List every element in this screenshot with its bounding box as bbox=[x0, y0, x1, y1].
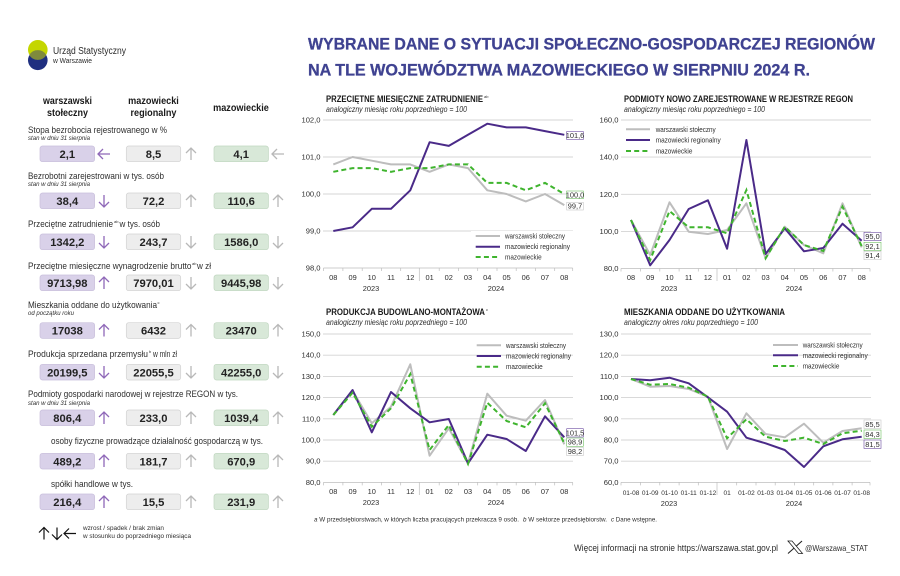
chart: przeciętne miesięczne zatrudnienie: 05 bbox=[502, 273, 511, 282]
chart: mieszkania oddane do użytkowania: 120,0 bbox=[599, 351, 618, 360]
indicator: produkcja sprzedana: 42255,0 bbox=[221, 367, 261, 379]
chart: mieszkania oddane do użytkowania: mazowiecki regionalny bbox=[803, 351, 868, 360]
chart: produkcja budowlano-montażowa: mazowieckie bbox=[506, 362, 543, 371]
indicator: bezrobotni zarejestrowani: stan w dniu 31 sierpnia bbox=[28, 182, 91, 188]
chart: przeciętne miesięczne zatrudnienie: 98,0 bbox=[306, 264, 320, 272]
chart: produkcja budowlano-montażowa: 130,0 bbox=[301, 372, 320, 381]
chart: przeciętne miesięczne zatrudnienie: PRZECIĘTNE MIESIĘCZNE ZATRUDNIENIE bbox=[326, 94, 483, 105]
indicator: przeciętne zatrudnienie: ab bbox=[114, 219, 119, 224]
indicator: osoby fizyczne bbox=[40, 436, 283, 469]
chart: produkcja budowlano-montażowa: 98,9 bbox=[568, 438, 582, 447]
indicator: podmioty REGON bbox=[28, 389, 283, 426]
column headers: warszawski bbox=[42, 95, 92, 107]
chart: przeciętne miesięczne zatrudnienie: 99,7 bbox=[568, 202, 582, 211]
chart: mieszkania oddane do użytkowania: 01-03 bbox=[757, 490, 774, 497]
indicator: spółki handlowe bbox=[40, 479, 283, 510]
title: WYBRANE DANE O SYTUACJI SPOŁECZNO-GOSPODARCZEJ REGIONÓW bbox=[308, 34, 876, 54]
indicator: wynagrodzenie brutto: 9445,98 bbox=[221, 278, 261, 290]
chart: mieszkania oddane do użytkowania: 81,5 bbox=[865, 440, 880, 449]
footer: X handle: @Warszawa_STAT bbox=[805, 543, 868, 553]
chart: przeciętne miesięczne zatrudnienie: 101,0 bbox=[301, 152, 320, 162]
chart: podmioty nowo zarejestrowane: 10 bbox=[665, 273, 674, 282]
chart: produkcja budowlano-montażowa: 101,5 bbox=[566, 428, 584, 437]
chart: mieszkania oddane do użytkowania: 130,0 bbox=[599, 330, 618, 338]
chart: produkcja budowlano-montażowa: 08 bbox=[329, 487, 337, 496]
chart: podmioty nowo zarejestrowane: 160,0 bbox=[599, 116, 618, 124]
indicator: spółki handlowe: spółki handlowe w tys. bbox=[51, 479, 133, 489]
logo: Urząd Statystyczny w Warszawie: Urząd Statystyczny bbox=[53, 46, 126, 57]
chart: mieszkania oddane do użytkowania: 84,3 bbox=[865, 430, 880, 439]
chart: podmioty nowo zarejestrowane: 140,0 bbox=[599, 153, 618, 162]
chart: produkcja budowlano-montażowa: 03 bbox=[464, 487, 472, 496]
chart: przeciętne miesięczne zatrudnienie: ab bbox=[484, 94, 489, 99]
chart: przeciętne miesięczne zatrudnienie: 06 bbox=[522, 273, 530, 282]
indicator: podmioty REGON: 1039,4 bbox=[224, 413, 259, 425]
column headers: stołeczny bbox=[47, 107, 88, 119]
chart: mieszkania oddane do użytkowania: 90,0 bbox=[604, 414, 618, 423]
chart: mieszkania oddane do użytkowania: analogiczny okres roku poprzedniego = 100 bbox=[624, 317, 758, 327]
title bbox=[308, 34, 876, 80]
chart: podmioty nowo zarejestrowane: 12 bbox=[704, 273, 712, 282]
chart: podmioty nowo zarejestrowane: analogiczny miesiąc roku poprzedniego = 100 bbox=[624, 104, 765, 114]
chart: podmioty nowo zarejestrowane: 120,0 bbox=[599, 190, 618, 199]
chart: mieszkania oddane do użytkowania: 01-02 bbox=[738, 490, 755, 497]
footnotes: a W przedsiębiorstwach, w których liczba pracujących przekracza 9 osób. bbox=[314, 516, 519, 524]
indicator: stopa bezrobocia: 2,1 bbox=[60, 149, 75, 161]
indicator: podmioty REGON: stan w dniu 31 sierpnia bbox=[28, 401, 91, 407]
column headers: mazowieckie bbox=[213, 102, 269, 114]
arrow legend: wzrost / spadek / brak zmian bbox=[82, 525, 164, 532]
chart: przeciętne miesięczne zatrudnienie: 2023 bbox=[363, 284, 379, 293]
indicator: bezrobotni zarejestrowani: 110,6 bbox=[228, 196, 255, 208]
chart: podmioty nowo zarejestrowane: 91,4 bbox=[865, 251, 880, 260]
indicator: mieszkania oddane: od początku roku bbox=[28, 311, 75, 317]
indicator: podmioty REGON: Podmioty gospodarki narodowej w rejestrze REGON w tys. bbox=[28, 389, 238, 399]
indicator: stopa bezrobocia: 4,1 bbox=[233, 149, 249, 161]
indicator: produkcja sprzedana: 20199,5 bbox=[47, 367, 88, 379]
chart: produkcja budowlano-montażowa: 140,0 bbox=[301, 351, 320, 360]
chart: produkcja budowlano-montażowa: 80,0 bbox=[306, 478, 320, 487]
chart: mieszkania oddane do użytkowania: 2023 bbox=[661, 499, 677, 508]
indicator: stopa bezrobocia: stan w dniu 31 sierpnia bbox=[28, 136, 91, 142]
title: NA TLE WOJEWÓDZTWA MAZOWIECKIEGO W SIERPNIU 2024 R. bbox=[308, 60, 810, 80]
chart: podmioty nowo zarejestrowane: 80,0 bbox=[604, 264, 618, 273]
indicator: bezrobotni zarejestrowani: 38,4 bbox=[56, 196, 79, 208]
chart: mieszkania oddane do użytkowania: MIESZKANIA ODDANE DO UŻYTKOWANIA bbox=[624, 307, 785, 318]
chart: podmioty nowo zarejestrowane: 2024 bbox=[786, 284, 802, 293]
chart: podmioty nowo zarejestrowane: 08 bbox=[627, 273, 635, 282]
indicator: wynagrodzenie brutto: Przeciętne miesięczne wynagrodzenie brutto bbox=[28, 261, 192, 271]
chart: przeciętne miesięczne zatrudnienie: warszawski stołeczny bbox=[504, 232, 565, 240]
chart: mieszkania oddane do użytkowania bbox=[599, 307, 881, 508]
chart: przeciętne miesięczne zatrudnienie: 02 bbox=[445, 273, 453, 282]
chart: podmioty nowo zarejestrowane: 01 bbox=[723, 273, 731, 282]
chart: produkcja budowlano-montażowa: 90,0 bbox=[306, 457, 320, 466]
chart: mieszkania oddane do użytkowania: 100,0 bbox=[599, 393, 618, 402]
chart: produkcja budowlano-montażowa: 2023 bbox=[363, 498, 379, 507]
chart: produkcja budowlano-montażowa: 09 bbox=[348, 487, 357, 496]
chart: mieszkania oddane do użytkowania: 85,5 bbox=[865, 420, 880, 429]
chart: produkcja budowlano-montażowa: c bbox=[486, 307, 488, 312]
chart: mieszkania oddane do użytkowania: mazowieckie bbox=[803, 362, 839, 370]
chart: produkcja budowlano-montażowa: 01 bbox=[425, 487, 434, 496]
chart: przeciętne miesięczne zatrudnienie: 03 bbox=[464, 273, 472, 282]
chart: przeciętne miesięczne zatrudnienie: mazowiecki regionalny bbox=[505, 242, 570, 251]
chart: przeciętne miesięczne zatrudnienie: 100,0 bbox=[566, 190, 584, 199]
indicator: stopa bezrobocia: 8,5 bbox=[146, 149, 161, 161]
chart: produkcja budowlano-montażowa: 05 bbox=[502, 487, 511, 496]
chart: mieszkania oddane do użytkowania: 01-08 bbox=[623, 490, 640, 497]
chart: produkcja budowlano-montażowa: 150,0 bbox=[301, 330, 320, 338]
chart: produkcja budowlano-montażowa: 04 bbox=[483, 487, 491, 496]
indicator: produkcja sprzedana: Produkcja sprzedana przemysłu bbox=[28, 349, 148, 359]
indicator: mieszkania oddane: c bbox=[158, 300, 160, 305]
logo: Urząd Statystyczny w Warszawie: w Warszawie bbox=[52, 58, 92, 65]
chart: mieszkania oddane do użytkowania: 60,0 bbox=[604, 478, 618, 487]
chart: produkcja budowlano-montażowa bbox=[301, 307, 584, 507]
chart: przeciętne miesięczne zatrudnienie: 10 bbox=[368, 273, 376, 282]
chart: podmioty nowo zarejestrowane: 92,1 bbox=[865, 242, 880, 251]
chart: mieszkania oddane do użytkowania: 01-09 bbox=[642, 490, 659, 497]
chart: produkcja budowlano-montażowa: 06 bbox=[522, 487, 530, 496]
chart: podmioty nowo zarejestrowane: 08 bbox=[858, 273, 866, 282]
chart: produkcja budowlano-montażowa: 12 bbox=[406, 487, 414, 496]
chart: podmioty nowo zarejestrowane: 04 bbox=[781, 273, 789, 282]
chart: produkcja budowlano-montażowa: 10 bbox=[368, 487, 376, 496]
chart: produkcja budowlano-montażowa: analogiczny miesiąc roku poprzedniego = 100 bbox=[326, 317, 467, 327]
indicator: wynagrodzenie brutto: w zł bbox=[196, 261, 211, 271]
chart: podmioty nowo zarejestrowane: mazowiecki regionalny bbox=[656, 136, 721, 144]
arrow legend: w stosunku do poprzedniego miesiąca bbox=[82, 533, 191, 540]
chart: mieszkania oddane do użytkowania: warszawski stołeczny bbox=[802, 340, 863, 350]
chart: produkcja budowlano-montażowa: 98,2 bbox=[568, 447, 582, 456]
chart: mieszkania oddane do użytkowania: 01-08 bbox=[853, 490, 870, 497]
chart: produkcja budowlano-montażowa: 11 bbox=[387, 487, 395, 496]
indicator: wynagrodzenie brutto: 9713,98 bbox=[47, 278, 88, 290]
chart: produkcja budowlano-montażowa: mazowiecki regionalny bbox=[506, 352, 571, 360]
footer: more information link: Więcej informacji na stronie https://warszawa.stat.gov.pl bbox=[574, 543, 778, 554]
chart: mieszkania oddane do użytkowania: 01-10 bbox=[661, 490, 678, 497]
chart: podmioty nowo zarejestrowane: 11 bbox=[685, 273, 693, 282]
chart: podmioty nowo zarejestrowane: 06 bbox=[819, 273, 827, 282]
indicator: mieszkania oddane: Mieszkania oddane do użytkowania bbox=[28, 300, 158, 310]
chart: podmioty nowo zarejestrowane: warszawski stołeczny bbox=[655, 125, 716, 134]
chart: przeciętne miesięczne zatrudnienie: 12 bbox=[406, 273, 414, 282]
column headers bbox=[42, 95, 269, 119]
chart: przeciętne miesięczne zatrudnienie: mazowieckie bbox=[505, 252, 542, 262]
chart: mieszkania oddane do użytkowania: 01-11 bbox=[681, 490, 697, 497]
chart: produkcja budowlano-montażowa: PRODUKCJA BUDOWLANO-MONTAŻOWA bbox=[326, 307, 485, 318]
chart: produkcja budowlano-montażowa: 08 bbox=[560, 487, 568, 496]
chart: mieszkania oddane do użytkowania: 70,0 bbox=[604, 457, 618, 466]
chart: mieszkania oddane do użytkowania: 80,0 bbox=[604, 436, 618, 444]
indicator: przeciętne zatrudnienie: 243,7 bbox=[140, 237, 168, 249]
indicator: wynagrodzenie brutto: ab bbox=[192, 261, 197, 266]
chart: przeciętne miesięczne zatrudnienie bbox=[301, 94, 584, 293]
indicator: przeciętne zatrudnienie: Przeciętne zatrudnienie bbox=[28, 219, 113, 229]
chart: mieszkania oddane do użytkowania: 01-05 bbox=[796, 490, 813, 497]
arrow legend bbox=[39, 525, 191, 540]
column headers: regionalny bbox=[130, 107, 177, 119]
chart: mieszkania oddane do użytkowania: 01-07 bbox=[834, 490, 851, 497]
indicator: bezrobotni zarejestrowani: Bezrobotni zarejestrowani w tys. osób bbox=[28, 171, 164, 181]
footnotes: c Dane wstępne. bbox=[611, 516, 657, 524]
indicator: stopa bezrobocia: Stopa bezrobocia rejestrowanego w % bbox=[28, 125, 167, 135]
indicator: przeciętne zatrudnienie: w tys. osób bbox=[119, 219, 160, 229]
chart: produkcja budowlano-montażowa: 02 bbox=[445, 487, 453, 496]
chart: przeciętne miesięczne zatrudnienie: 09 bbox=[348, 273, 357, 282]
chart: przeciętne miesięczne zatrudnienie: 101,6 bbox=[566, 131, 584, 140]
indicator: przeciętne zatrudnienie: 1342,2 bbox=[50, 237, 84, 249]
indicator: mieszkania oddane bbox=[28, 300, 283, 338]
indicator: osoby fizyczne: 670,9 bbox=[227, 456, 255, 468]
indicator: podmioty REGON: 233,0 bbox=[140, 413, 168, 425]
footnotes: b W sektorze przedsiębiorstw. bbox=[523, 516, 607, 524]
chart: produkcja budowlano-montażowa: warszawski stołeczny bbox=[505, 341, 566, 350]
icon: X logo bbox=[788, 541, 802, 554]
chart: produkcja budowlano-montażowa: 110,0 bbox=[302, 414, 320, 423]
chart: podmioty nowo zarejestrowane: 03 bbox=[761, 273, 770, 282]
chart: przeciętne miesięczne zatrudnienie: 11 bbox=[387, 273, 395, 282]
chart: przeciętne miesięczne zatrudnienie: 07 bbox=[541, 273, 549, 282]
logo: Urząd Statystyczny w Warszawie bbox=[28, 40, 126, 70]
chart: przeciętne miesięczne zatrudnienie: 04 bbox=[483, 273, 491, 282]
chart: przeciętne miesięczne zatrudnienie: analogiczny miesiąc roku poprzedniego = 100 bbox=[326, 104, 467, 114]
indicator: spółki handlowe: 216,4 bbox=[53, 497, 82, 509]
chart: produkcja budowlano-montażowa: 100,0 bbox=[301, 436, 320, 444]
indicator: mieszkania oddane: 23470 bbox=[226, 326, 257, 338]
indicator: produkcja sprzedana bbox=[28, 349, 283, 380]
indicator: bezrobotni zarejestrowani: 72,2 bbox=[143, 196, 164, 208]
chart: podmioty nowo zarejestrowane: 2023 bbox=[661, 284, 677, 293]
chart: mieszkania oddane do użytkowania: 01 bbox=[723, 490, 731, 497]
chart: mieszkania oddane do użytkowania: 2024 bbox=[786, 499, 802, 508]
indicator: spółki handlowe: 15,5 bbox=[143, 497, 164, 509]
chart: mieszkania oddane do użytkowania: 01-12 bbox=[700, 490, 717, 497]
chart: podmioty nowo zarejestrowane: 07 bbox=[838, 273, 847, 282]
indicator: mieszkania oddane: 17038 bbox=[52, 326, 83, 338]
chart: przeciętne miesięczne zatrudnienie: 08 bbox=[560, 273, 568, 282]
chart: podmioty nowo zarejestrowane: 09 bbox=[646, 273, 654, 282]
indicator: wynagrodzenie brutto bbox=[28, 261, 283, 291]
chart: mieszkania oddane do użytkowania: 01-06 bbox=[815, 490, 832, 497]
indicator: produkcja sprzedana: w mln zł bbox=[152, 349, 177, 359]
chart: podmioty nowo zarejestrowane: 95,0 bbox=[865, 232, 880, 241]
chart: produkcja budowlano-montażowa: 07 bbox=[541, 487, 549, 496]
chart: mieszkania oddane do użytkowania: 110,0 bbox=[600, 372, 618, 381]
chart: przeciętne miesięczne zatrudnienie: 99,0 bbox=[306, 226, 320, 236]
indicator: podmioty REGON: 806,4 bbox=[53, 413, 82, 425]
indicator: wynagrodzenie brutto: 7970,01 bbox=[133, 278, 174, 290]
chart: produkcja budowlano-montażowa: 2024 bbox=[488, 498, 504, 507]
indicator: produkcja sprzedana: b bbox=[149, 349, 152, 354]
indicator: spółki handlowe: 231,9 bbox=[227, 497, 255, 509]
indicator: przeciętne zatrudnienie: 1586,0 bbox=[224, 237, 258, 249]
footnotes bbox=[314, 516, 657, 524]
chart: przeciętne miesięczne zatrudnienie: 01 bbox=[425, 273, 434, 282]
chart: podmioty nowo zarejestrowane bbox=[599, 94, 881, 293]
chart: przeciętne miesięczne zatrudnienie: 102,0 bbox=[301, 116, 320, 124]
chart: przeciętne miesięczne zatrudnienie: 08 bbox=[329, 273, 337, 282]
indicator: stopa bezrobocia bbox=[28, 125, 284, 162]
chart: przeciętne miesięczne zatrudnienie: 2024 bbox=[488, 284, 504, 293]
indicator: bezrobotni zarejestrowani bbox=[28, 171, 283, 209]
chart: mieszkania oddane do użytkowania: 01-04 bbox=[776, 490, 793, 497]
indicator: osoby fizyczne: osoby fizyczne prowadzące działalność gospodarczą w tys. bbox=[51, 436, 263, 446]
indicator: osoby fizyczne: 489,2 bbox=[53, 456, 81, 468]
chart: produkcja budowlano-montażowa: 120,0 bbox=[301, 393, 320, 402]
indicator: produkcja sprzedana: 22055,5 bbox=[133, 367, 174, 379]
indicator: osoby fizyczne: 181,7 bbox=[140, 456, 168, 468]
chart: podmioty nowo zarejestrowane: 05 bbox=[800, 273, 808, 282]
chart: podmioty nowo zarejestrowane: mazowieckie bbox=[656, 146, 692, 156]
indicator: mieszkania oddane: 6432 bbox=[141, 326, 166, 338]
chart: podmioty nowo zarejestrowane: 02 bbox=[742, 273, 751, 282]
indicator: przeciętne zatrudnienie bbox=[28, 219, 283, 250]
chart: podmioty nowo zarejestrowane: 100,0 bbox=[599, 227, 618, 236]
column headers: mazowiecki bbox=[128, 95, 179, 107]
chart: przeciętne miesięczne zatrudnienie: 100,0 bbox=[301, 190, 320, 198]
